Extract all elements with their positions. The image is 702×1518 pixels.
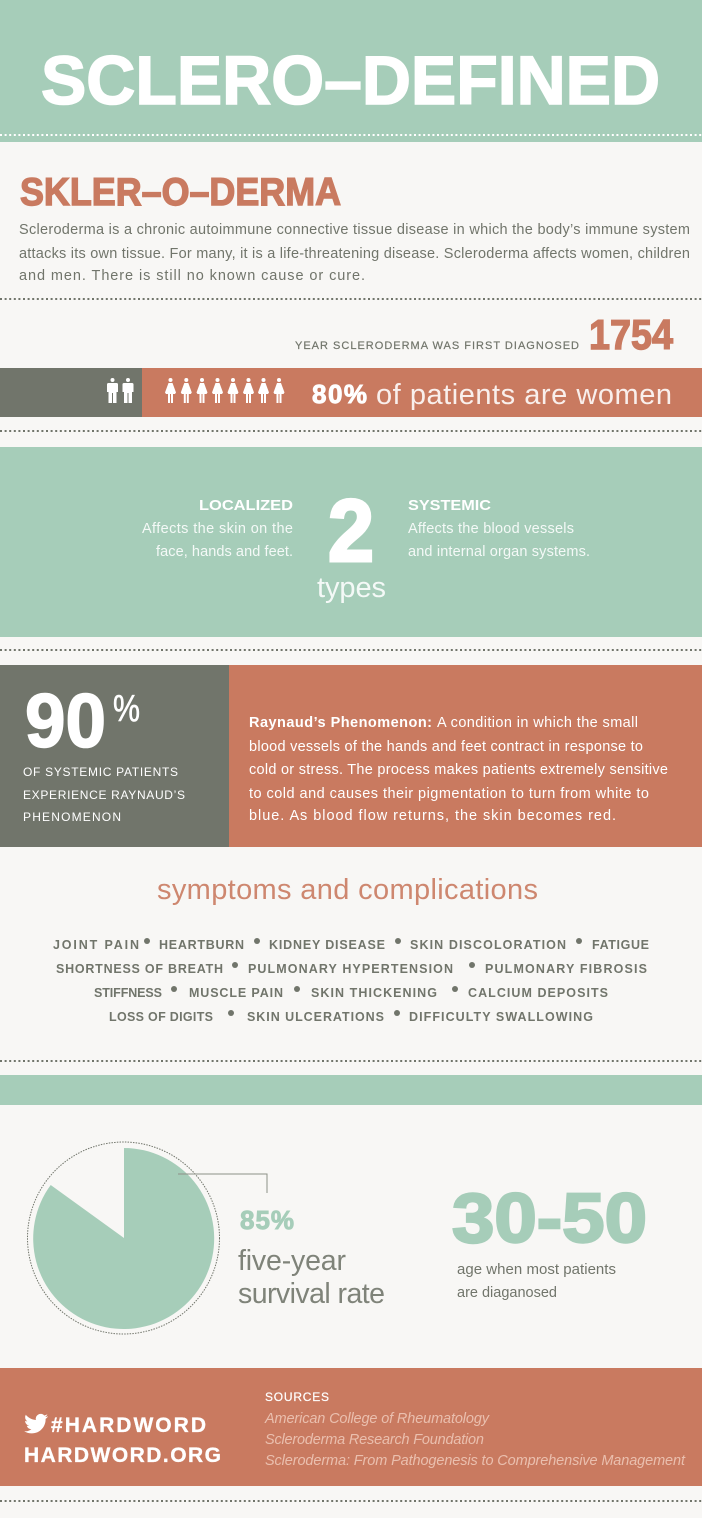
patients gender band (0, 368, 702, 417)
social handle: #HARDWORD (51, 1414, 206, 1437)
definition paragraph (19, 222, 690, 284)
pie chart: five-year survival (28, 1142, 267, 1334)
icon: twitter bird (24, 1414, 48, 1433)
women percentage: 80% (312, 379, 367, 409)
social handle: HARDWORD.ORG (24, 1444, 221, 1467)
symptoms list: CALCIUM DEPOSITS (468, 986, 608, 1000)
pronunciation heading: SKLER–O–DERMA (20, 171, 341, 214)
sources: Scleroderma: From Pathogenesis to Comprehensive Management (265, 1453, 686, 1469)
icons: men (107, 378, 134, 403)
symptoms list: PULMONARY FIBROSIS (485, 962, 647, 976)
icons: women (165, 378, 284, 403)
footer panel (0, 1368, 702, 1486)
panel: Raynaud's definition: blue. As blood flow returns, the skin becomes red. (249, 808, 616, 824)
localized: LOCALIZED (199, 497, 293, 514)
first diagnosed year (295, 311, 674, 358)
number of types: 2 (328, 481, 374, 580)
symptoms list: LOSS OF DIGITS (109, 1010, 213, 1024)
social handle (24, 1414, 221, 1467)
panel: 90 percent stat: % (113, 688, 140, 730)
age at diagnosis stat: 30-50 (452, 1179, 647, 1257)
systemic: and internal organ systems. (408, 544, 590, 560)
definition paragraph: Scleroderma is a chronic autoimmune connective tissue disease in which the body’s immune system (19, 222, 690, 238)
systemic: Affects the blood vessels (408, 521, 574, 537)
symptoms list: MUSCLE PAIN (189, 986, 283, 1000)
panel: Raynaud's definition: blood vessels of the hands and feet contract in response to (249, 739, 643, 755)
panel: Raynaud's definition: A condition in which the small (437, 715, 638, 731)
symptoms list: STIFFNESS (94, 986, 162, 1000)
panel: two types (0, 447, 702, 637)
first diagnosed year: YEAR SCLERODERMA WAS FIRST DIAGNOSED (295, 340, 579, 352)
sources: Scleroderma Research Foundation (265, 1432, 484, 1448)
title: SCLERO–DEFINED (41, 42, 660, 119)
header band (0, 0, 702, 142)
age at diagnosis stat: age when most patients (457, 1261, 616, 1278)
sources (264, 1390, 686, 1469)
symptoms list: SKIN THICKENING (311, 986, 437, 1000)
panel: Raynaud's definition: Raynaud’s Phenomenon: (249, 715, 432, 731)
symptoms list: SHORTNESS OF BREATH (56, 962, 223, 976)
symptoms list: PULMONARY HYPERTENSION (248, 962, 453, 976)
number of types: types (317, 572, 386, 604)
systemic: SYSTEMIC (408, 497, 491, 514)
first diagnosed year: 1754 (589, 311, 674, 358)
panel: 90 percent stat: OF SYSTEMIC PATIENTS (23, 765, 178, 779)
systemic (408, 497, 590, 560)
localized: Affects the skin on the (142, 521, 293, 537)
panel: 90 percent stat: PHENOMENON (23, 810, 121, 824)
symptoms list: FATIGUE (592, 938, 649, 952)
survival rate stat: five-year (238, 1245, 346, 1277)
panel: 90 percent stat (0, 665, 229, 847)
panel: Raynaud's definition: cold or stress. The process makes patients extremely sensitive (249, 762, 668, 778)
definition paragraph: attacks its own tissue. For many, it is a life-threatening disease. Scleroderma affects women, children (19, 246, 690, 262)
definition section (19, 171, 690, 284)
panel: Raynaud's definition (229, 665, 702, 847)
sources: American College of Rheumatology (264, 1411, 490, 1427)
localized (142, 497, 293, 560)
symptoms list: KIDNEY DISEASE (269, 938, 385, 952)
sources: SOURCES (265, 1390, 329, 1404)
panel: 90 percent stat: 90 (25, 679, 106, 764)
symptoms list: HEARTBURN (159, 938, 244, 952)
survival rate stat: 85% (240, 1205, 294, 1235)
panel: 90 percent stat: EXPERIENCE RAYNAUD’S (23, 788, 185, 802)
localized: face, hands and feet. (156, 544, 293, 560)
symptoms section (53, 874, 649, 1024)
survival rate stat: survival rate (238, 1278, 385, 1310)
symptoms heading: symptoms and complications (157, 874, 538, 906)
patients gender band: of patients are women (376, 379, 672, 411)
symptoms list: JOINT PAIN (53, 938, 139, 952)
symptoms list (53, 938, 649, 1024)
symptoms list: DIFFICULTY SWALLOWING (409, 1010, 593, 1024)
symptoms list: SKIN ULCERATIONS (247, 1010, 384, 1024)
age at diagnosis stat (452, 1179, 647, 1301)
panel: Raynaud's definition: to cold and causes their pigmentation to turn from white to (249, 786, 649, 802)
definition paragraph: and men. There is still no known cause or cure. (19, 268, 365, 284)
number of types (317, 481, 386, 604)
age at diagnosis stat: are diaganosed (457, 1285, 557, 1301)
symptoms list: SKIN DISCOLORATION (410, 938, 566, 952)
survival rate stat (238, 1205, 385, 1310)
